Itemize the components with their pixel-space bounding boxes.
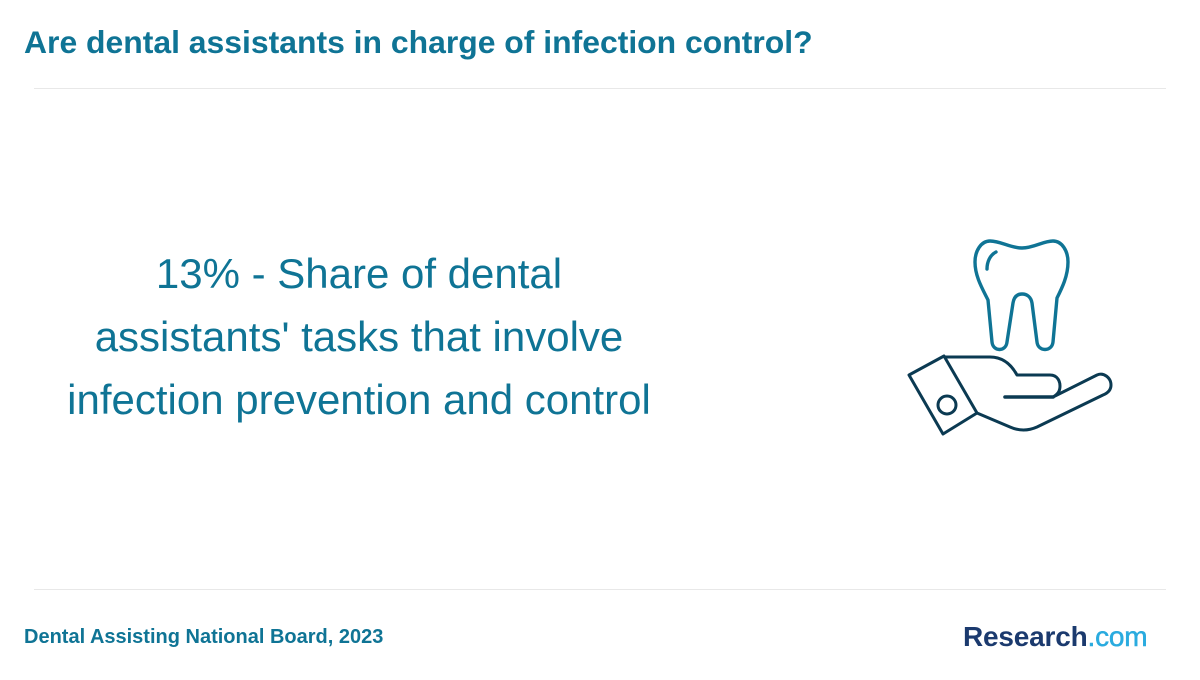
icon: tooth bbox=[975, 241, 1068, 350]
main statistic text: assistants' tasks that involve bbox=[95, 313, 623, 360]
logo: Research.com: Research.com bbox=[963, 621, 1147, 652]
icon: hand holding tooth bbox=[907, 239, 1112, 436]
main statistic text: 13% - Share of dental bbox=[156, 250, 562, 297]
icon: hand bbox=[909, 356, 1111, 434]
source note: Dental Assisting National Board, 2023 bbox=[24, 626, 383, 648]
main statistic text bbox=[67, 250, 651, 423]
title: Are dental assistants in charge of infection control? bbox=[24, 24, 813, 60]
main statistic text: infection prevention and control bbox=[67, 376, 651, 423]
